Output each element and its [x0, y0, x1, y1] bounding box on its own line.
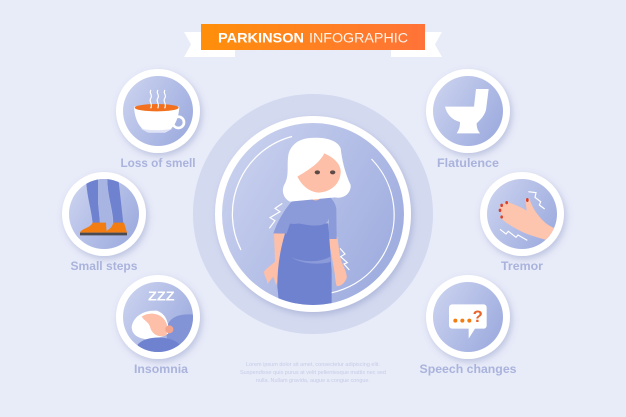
label: Small steps [70, 259, 138, 273]
icon: shaking hand [499, 192, 558, 243]
panel: flatulence [426, 69, 510, 170]
title: PARKINSON INFOGRAPHIC [218, 30, 408, 46]
decorative orbit lines [232, 136, 394, 295]
footer text: Lorem ipsum dolor sit amet, consectetur adipiscing elit. [246, 362, 380, 368]
central halo [193, 94, 433, 334]
icon: toilet [445, 89, 489, 133]
panel: tremor [480, 172, 564, 273]
panel: small steps [62, 172, 146, 273]
icon: speech bubble: ? [473, 307, 483, 326]
footer text: Suspendisse quis purus at velit pellentesque mattis nec sed [240, 370, 386, 376]
title banner [184, 24, 442, 57]
woman figure [264, 138, 351, 307]
label: Speech changes [420, 362, 517, 376]
label: Loss of smell [120, 156, 196, 170]
panel: insomnia [116, 275, 200, 376]
panel: loss of smell [116, 69, 200, 170]
icon: walking legs [80, 178, 127, 235]
label: Insomnia [134, 362, 188, 376]
panel: speech changes [420, 275, 517, 376]
central portrait [215, 116, 411, 312]
label: Tremor [501, 259, 543, 273]
label: Flatulence [437, 156, 499, 170]
icon: sleeping head: ZZZ [148, 290, 175, 304]
footer text: nulla. Nullam gravida, augue a congue congue. [256, 378, 370, 384]
footer text [240, 362, 386, 384]
icon: steaming cup [134, 90, 184, 133]
